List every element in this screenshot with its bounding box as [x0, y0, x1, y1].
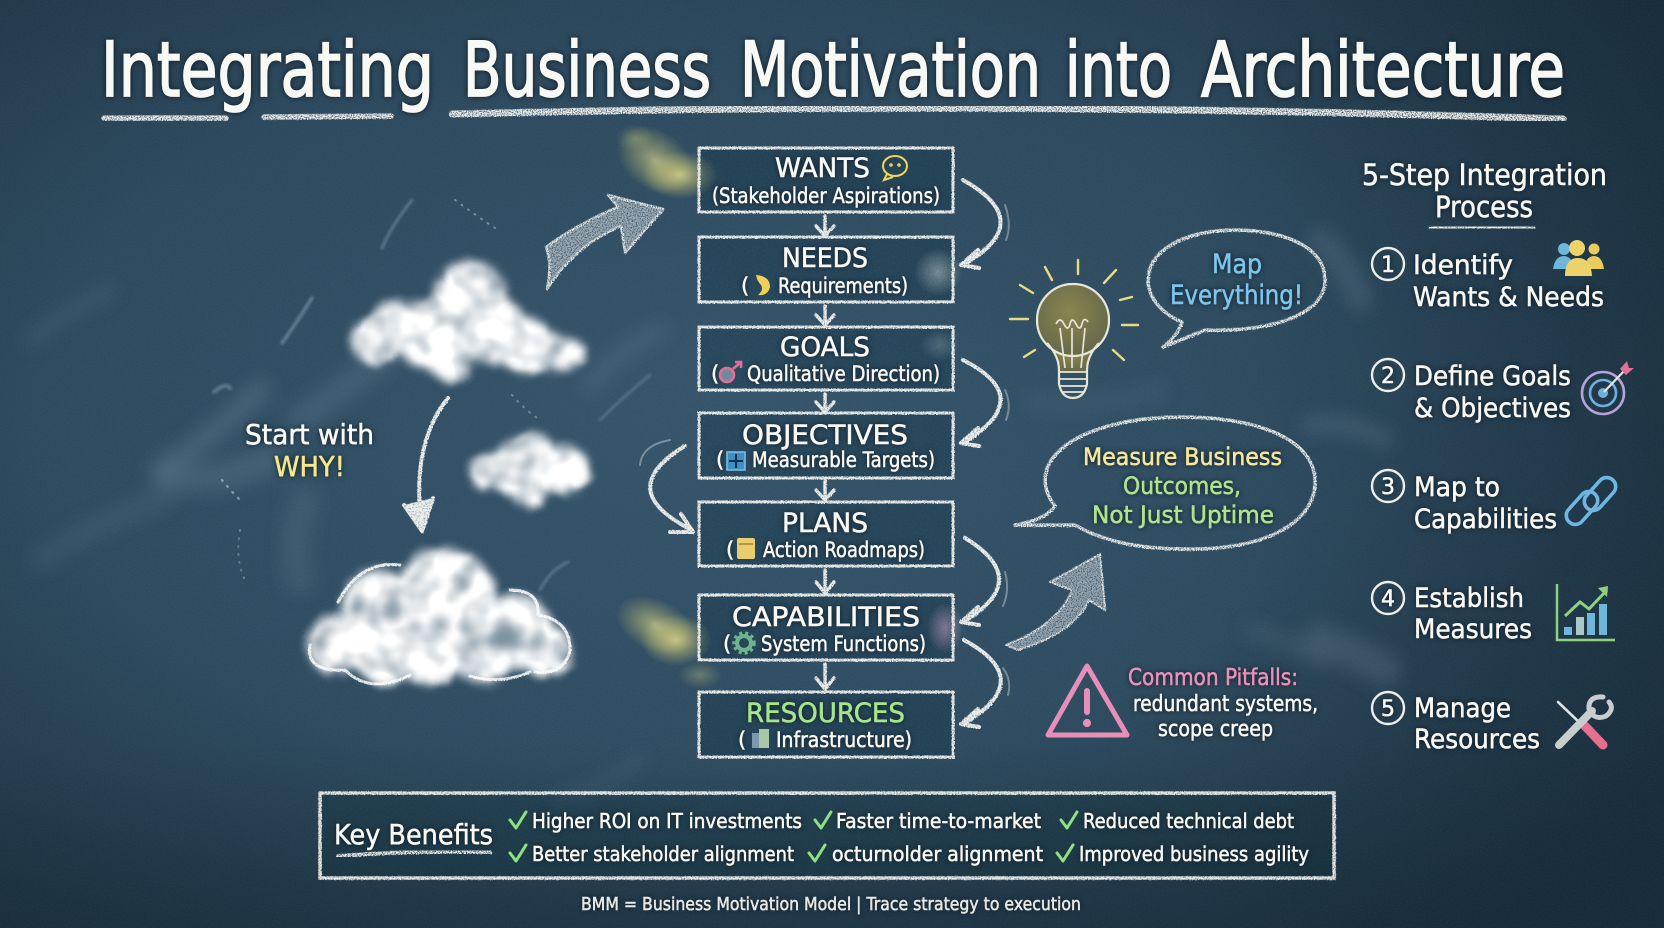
- box: needs: NEEDS: [782, 243, 868, 274]
- speech bubble: measure outcomes: Outcomes,: [1123, 472, 1241, 500]
- box: goals: (: [711, 362, 719, 386]
- icon: target: [1582, 361, 1634, 414]
- icon: warning triangle: [1048, 666, 1127, 735]
- box: objectives: (: [716, 448, 724, 472]
- box: needs: Requirements): [778, 274, 908, 298]
- icon: chain link: [1563, 474, 1619, 528]
- box: needs: [699, 237, 953, 302]
- speech bubble: map everything: Everything!: [1170, 280, 1303, 311]
- cloud: middle: [470, 433, 589, 507]
- box: objectives: [699, 413, 953, 478]
- step 3: Map to: [1414, 472, 1500, 503]
- title underline: [104, 108, 1563, 119]
- box: resources: Infrastructure): [776, 728, 912, 752]
- icon: server block: [752, 729, 769, 748]
- title: Motivation: [740, 25, 1041, 114]
- cloud: top: [351, 261, 585, 380]
- icon: people: [1553, 240, 1604, 276]
- step 5: [1372, 692, 1611, 755]
- step 4: Measures: [1414, 614, 1532, 645]
- icon: tools: [1558, 697, 1611, 745]
- title: [101, 25, 1565, 114]
- benefits row 2: Better stakeholder alignment: [532, 842, 794, 866]
- heading: process: [1362, 158, 1607, 224]
- icon: growth chart: [1557, 584, 1615, 640]
- title: Architecture: [1201, 25, 1565, 114]
- box: goals: Qualitative Direction): [747, 362, 940, 386]
- callout: common pitfalls: scope creep: [1158, 717, 1273, 742]
- box: plans: [699, 502, 953, 566]
- ghost strokes beside curved links: [640, 205, 1009, 695]
- yellow chalk smudges: [603, 111, 963, 689]
- step 3: [1372, 470, 1619, 535]
- step 1: Wants & Needs: [1413, 282, 1604, 313]
- box: resources: [699, 692, 953, 757]
- callout: start with why: Start with: [245, 418, 374, 451]
- box: resources: RESOURCES: [746, 698, 905, 729]
- step 2: Define Goals: [1414, 361, 1571, 392]
- box: objectives: Measurable Targets): [752, 448, 935, 472]
- arrows: curved side links: [650, 180, 1001, 727]
- callout: common pitfalls: redundant systems,: [1133, 692, 1318, 717]
- step 2: [1372, 359, 1634, 424]
- box: wants: [699, 148, 953, 212]
- box: objectives: OBJECTIVES: [742, 420, 908, 451]
- flow: business motivation stack: [640, 148, 1009, 757]
- box: capabilities: System Functions): [761, 632, 926, 656]
- benefits row 1: [510, 809, 1294, 833]
- heading: process: 5-Step Integration: [1362, 158, 1607, 192]
- step 2: 2: [1381, 364, 1395, 389]
- title: into: [1065, 25, 1172, 114]
- heading: process: Process: [1435, 190, 1533, 224]
- box: capabilities: [699, 595, 953, 660]
- speech bubble: measure outcomes: Not Just Uptime: [1092, 501, 1274, 529]
- box: wants: (Stakeholder Aspirations): [712, 184, 940, 208]
- benefits row 2: [510, 842, 1309, 866]
- box: plans: Action Roadmaps): [763, 538, 925, 562]
- arrows: down between boxes: [816, 216, 834, 689]
- step 4: Establish: [1414, 583, 1524, 614]
- icon: speech bubble: [883, 156, 907, 180]
- icon: roadmap note: [737, 538, 755, 559]
- icon: gear: [734, 633, 754, 653]
- step 1: Identify: [1413, 250, 1513, 281]
- step 4: 4: [1381, 587, 1395, 612]
- step 5: 5: [1381, 697, 1395, 722]
- callout: start with why: WHY!: [274, 450, 345, 483]
- box: plans: (: [726, 538, 734, 562]
- box: plans: PLANS: [782, 508, 868, 539]
- step 5: Manage: [1414, 693, 1511, 724]
- box: goals: GOALS: [780, 332, 870, 363]
- step 1: 1: [1381, 253, 1395, 278]
- box: needs: (: [741, 274, 749, 298]
- speech bubble: map everything: Map: [1212, 249, 1262, 280]
- step 3: 3: [1381, 475, 1395, 500]
- speech bubble: map everything: [1148, 230, 1325, 347]
- icon: target symbol: [720, 362, 741, 382]
- icon: needs blob: [756, 275, 770, 295]
- title: Business: [463, 25, 711, 114]
- step 3: Capabilities: [1414, 504, 1557, 535]
- footer note: BMM = Business Motivation Model | Trace strategy to execution: [581, 894, 1081, 915]
- step 4: [1372, 582, 1615, 645]
- cloud: bottom: [308, 548, 571, 685]
- box: goals: [699, 327, 953, 390]
- title: Integrating: [101, 25, 434, 114]
- step 1: [1372, 240, 1604, 313]
- panel: 5-step integration process: [1362, 158, 1634, 755]
- box: wants: WANTS: [775, 153, 870, 184]
- callout: start with why: [245, 418, 374, 483]
- speech bubble: measure outcomes: Measure Business: [1083, 443, 1282, 471]
- benefits row 2: octurnolder alignment: [832, 842, 1043, 866]
- arrow: to measure bubble: [1006, 554, 1105, 650]
- benefits row 2: Improved business agility: [1079, 842, 1309, 866]
- box: capabilities: CAPABILITIES: [732, 602, 920, 633]
- box: resources: (: [738, 728, 746, 752]
- benefits row 1: Reduced technical debt: [1083, 809, 1294, 833]
- icon: grid: [727, 452, 745, 470]
- speech bubble: measure outcomes: [1015, 417, 1315, 549]
- callout: common pitfalls: [1048, 665, 1318, 742]
- icon: light bulb: [1010, 260, 1138, 398]
- step 2: & Objectives: [1414, 393, 1571, 424]
- benefits row 1: Faster time-to-market: [836, 809, 1041, 833]
- callout: common pitfalls: Common Pitfalls:: [1128, 665, 1298, 691]
- step 5: Resources: [1414, 724, 1540, 755]
- panel: key benefits: [320, 793, 1334, 878]
- heading: key benefits: Key Benefits: [334, 818, 493, 851]
- arrow: to wants: [546, 195, 663, 289]
- arrow: cloud to cloud: [404, 398, 448, 531]
- benefits row 1: Higher ROI on IT investments: [532, 809, 802, 833]
- box: capabilities: (: [723, 632, 731, 656]
